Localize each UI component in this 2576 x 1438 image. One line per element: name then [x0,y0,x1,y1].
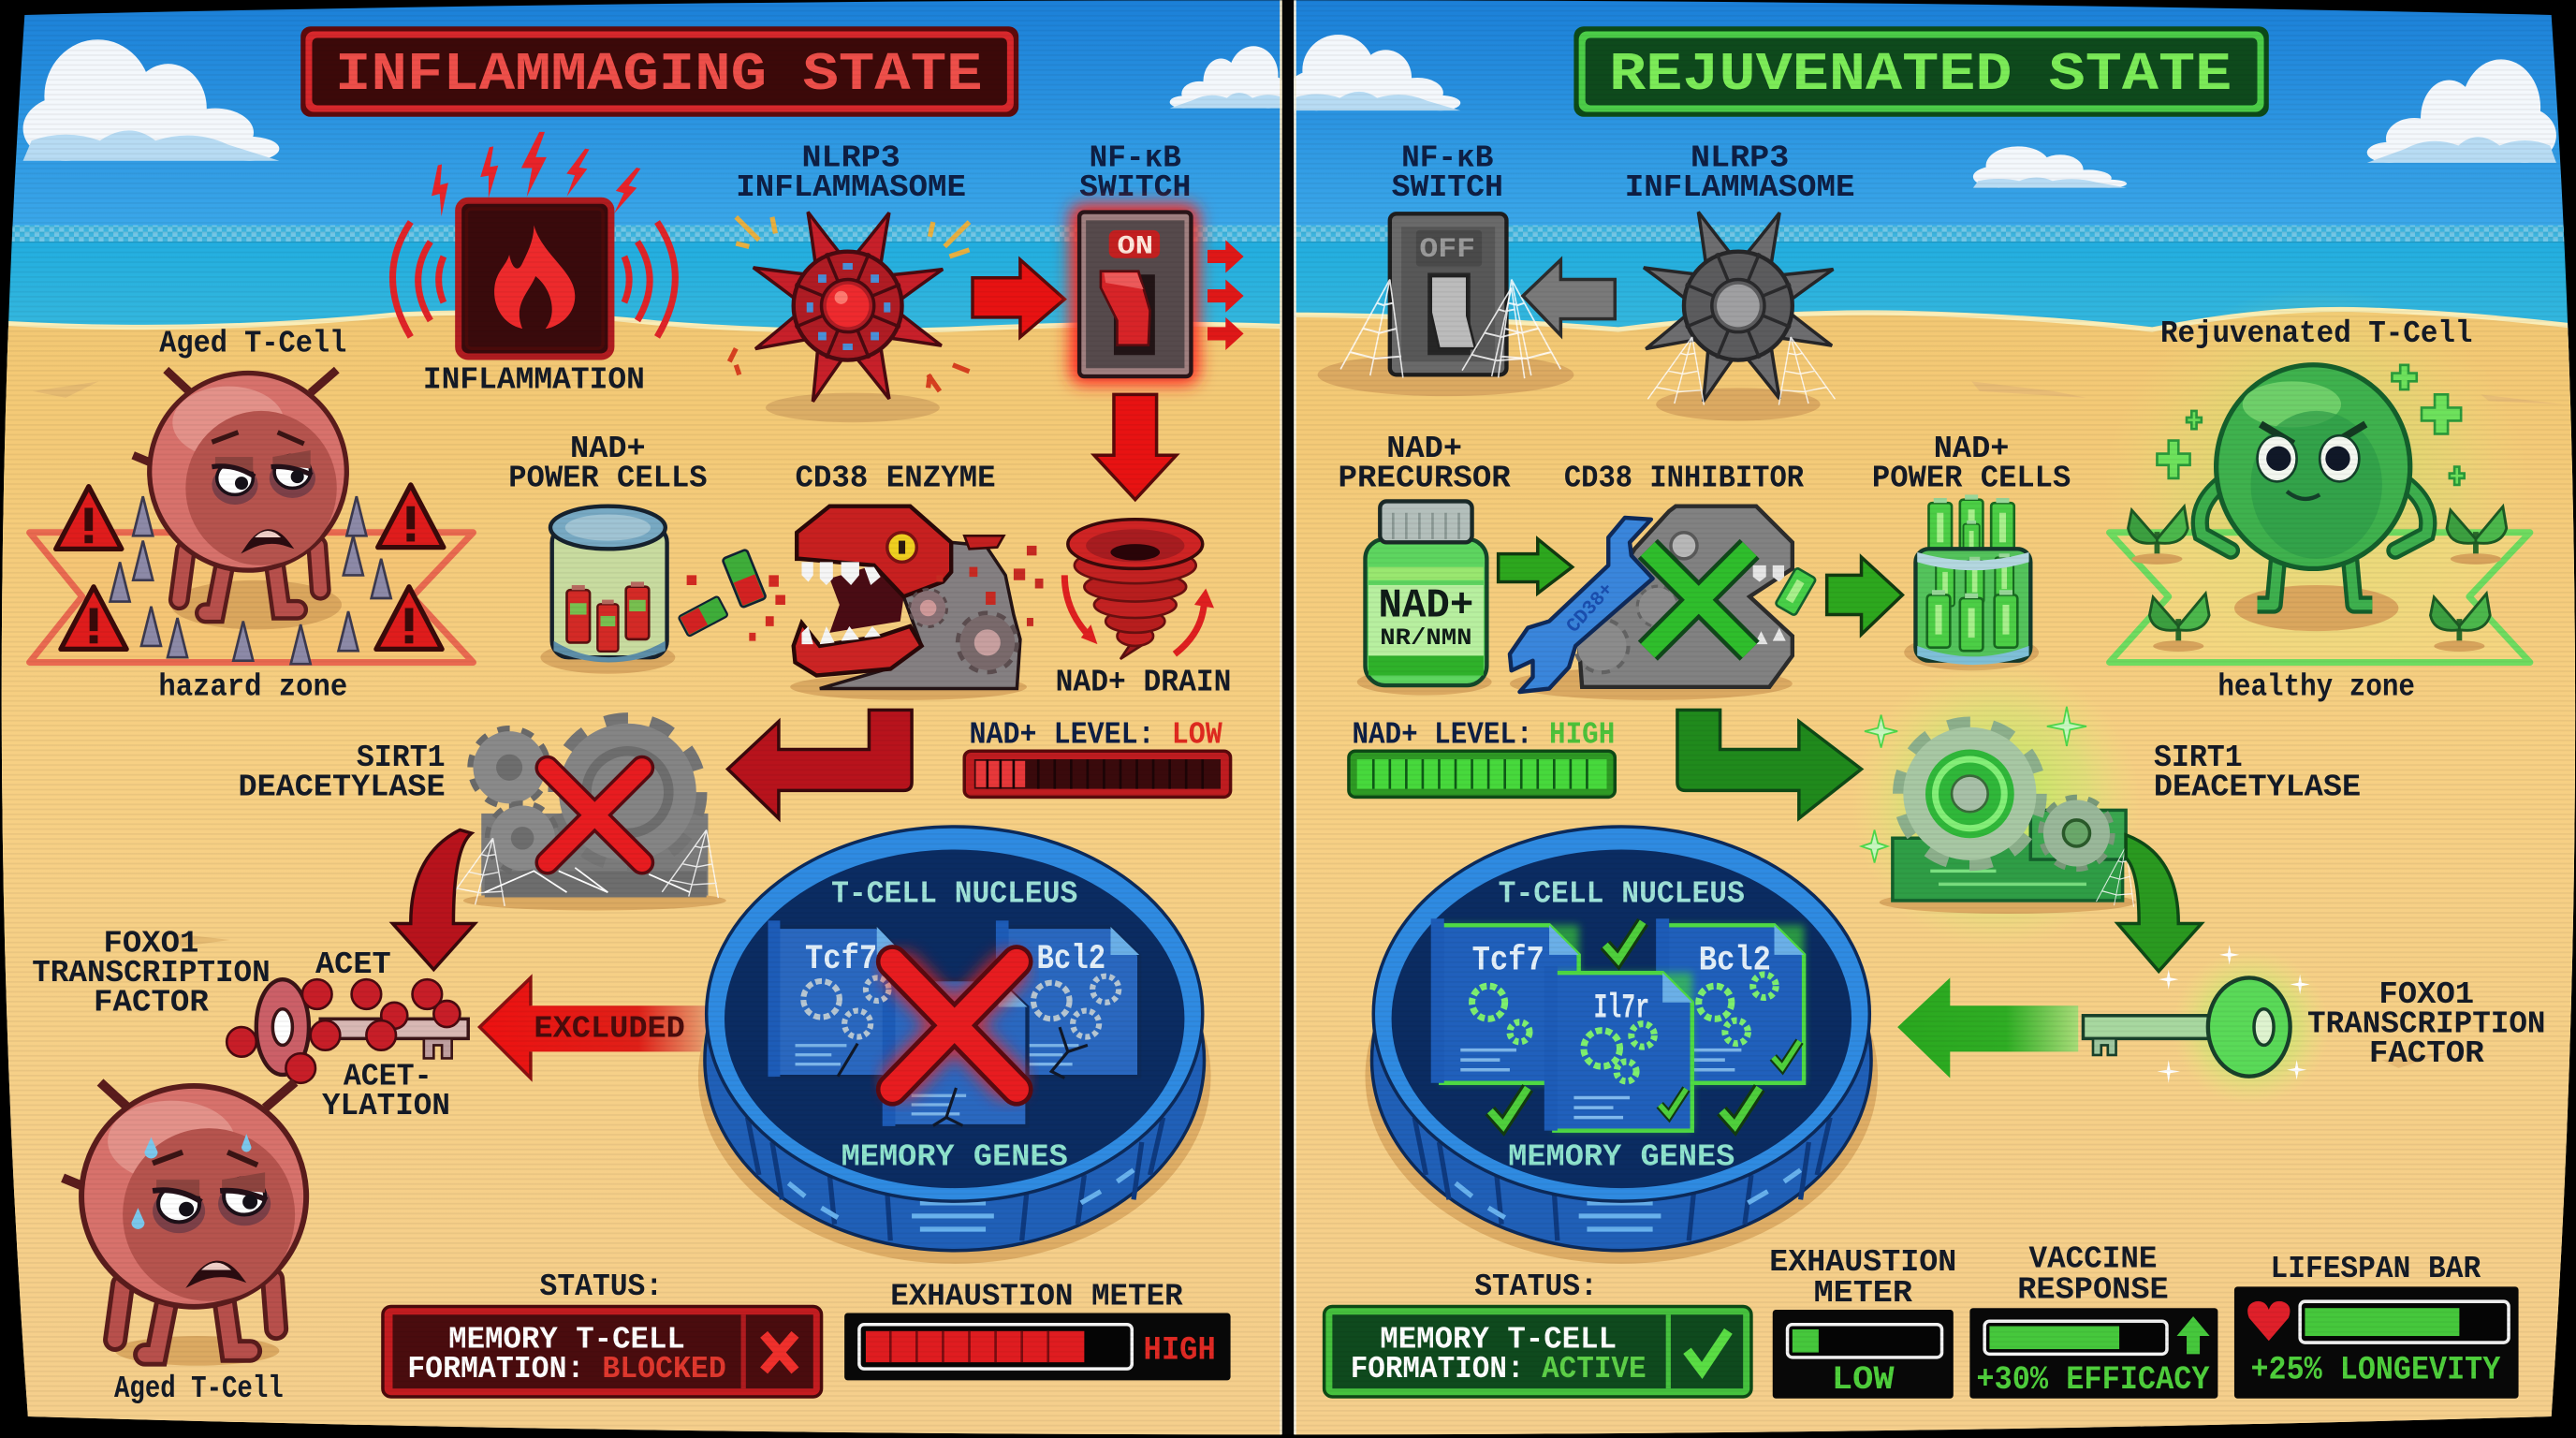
label: nf-kb switch: SWITCH [1079,170,1191,206]
icon: nlrp3 inflammasome red [729,206,970,422]
panel: t-cell nucleus active: Tcf7 [1472,942,1544,981]
panel: rejuvenated state [1288,0,2576,1438]
panel: t-cell nucleus active: MEMORY GENES [1508,1140,1734,1176]
icon: nad+ precursor bottle [1357,501,1492,696]
status box: active: FORMATION: ACTIVE [1351,1352,1647,1387]
label: nf-kb switch right: NF-κB [1401,140,1493,176]
label: sirt1 deacetylase right: SIRT1 [2154,741,2243,776]
arrow: inactive gray [1523,259,1615,335]
label: aged t-cell lower: Aged T-Cell [114,1372,284,1407]
arrow: nlrp3 to nf-kb [973,259,1064,337]
icons: sparkle plus [2157,365,2465,485]
panel: inflammaging state [0,0,1288,1438]
gauge: exhaustion low: LOW [1832,1361,1895,1399]
title banner: rejuvenated state: REJUVENATED STATE [1609,45,2232,106]
label: healthy zone: healthy zone [2217,670,2415,706]
label: nlrp3 inflammasome: INFLAMMASOME [736,170,966,206]
icon: nad+ drain tornado [1064,520,1214,659]
label: sirt1 deacetylase right: DEACETYLASE [2154,770,2361,806]
panel: t-cell nucleus blocked [698,827,1211,1264]
label: acet: ACET [315,947,391,983]
label: foxo1 transcription factor [32,926,271,1021]
panel: t-cell nucleus blocked: Bcl2 [1036,940,1105,979]
label: lifespan bar: LIFESPAN BAR [2271,1252,2481,1287]
icon: cd38 inhibitor: CD38+ [1562,579,1618,638]
arrows: switch output [1208,240,1244,350]
gauge: exhaustion low [1773,1310,1954,1399]
label: nad+ drain: NAD+ DRAIN [1056,665,1231,700]
character: aged t-cell on hazard zone [133,370,346,613]
icon: escaping batteries [679,550,785,641]
arrow: inhibitor to sirt1 [1677,710,1862,818]
label: exhaustion meter: EXHAUSTION METER [890,1280,1183,1315]
icon: cd38 inhibitor [1510,506,1816,700]
label: nad+ precursor [1339,432,1511,497]
panel: t-cell nucleus active: T-CELL NUCLEUS [1499,877,1745,913]
label: hazard zone: hazard zone [158,670,347,706]
arrow: foxo1 to nucleus [1897,977,2078,1078]
panel: t-cell nucleus active [1365,827,1878,1264]
arrow: excluded: EXCLUDED [534,1012,685,1048]
status box: blocked [383,1306,822,1397]
label: foxo1 transcription factor right: FACTOR [2369,1036,2484,1072]
label: foxo1 transcription factor right [2307,977,2546,1072]
arrow: switch to drain [1094,394,1177,500]
label: vaccine response [2017,1241,2169,1309]
icon: nf-kb switch off [1318,213,1573,396]
icon: nlrp3 inflammasome gray [1638,206,1838,420]
title banner: rejuvenated state [1573,26,2269,117]
label: nad+ precursor: PRECURSOR [1339,462,1511,497]
panel: healthy zone [2103,287,2530,698]
gauge: vaccine response: +30% EFFICACY [1976,1361,2210,1399]
label: nad+ power cells right: NAD+ [1934,432,2009,467]
label: nf-kb switch right: SWITCH [1392,170,1503,206]
icon: nf-kb switch off: OFF [1419,233,1475,265]
label: sirt1 deacetylase: SIRT1 [357,741,446,776]
panel: hazard zone [30,485,473,664]
label: status right: STATUS: [1474,1269,1598,1305]
label: sirt1 deacetylase: DEACETYLASE [238,770,446,806]
label: acetylation: YLATION [322,1089,450,1124]
label: inflammation: INFLAMMATION [423,362,645,398]
label: nad+ power cells: POWER CELLS [508,462,708,497]
label: nad+ power cells [508,432,708,497]
label: nad+ power cells right: POWER CELLS [1872,462,2071,497]
label: cd38 inhibitor: CD38 INHIBITOR [1564,462,1804,497]
label: acetylation [322,1060,450,1124]
label: acetylation: ACET- [344,1060,432,1095]
gauge: nad+ level low [964,751,1231,797]
panel: t-cell nucleus active: Bcl2 [1699,942,1771,981]
status box: active: MEMORY T-CELL [1380,1322,1617,1357]
label: sirt1 deacetylase [238,741,446,806]
label: foxo1 transcription factor: FOXO1 [104,926,198,961]
icon: nf-kb switch on: ON [1117,232,1153,261]
label: rejuvenated t-cell: Rejuvenated T-Cell [2160,316,2472,352]
icon: inflammation [392,132,675,357]
icon: nf-kb switch on [1070,204,1199,385]
label: vaccine response: RESPONSE [2017,1273,2169,1309]
arrow: sirt1 to foxo1 [392,829,475,970]
arrow: excluded [479,977,707,1078]
arrow: inhibitor to cells [1827,557,1902,635]
label: aged t-cell: Aged T-Cell [159,327,346,362]
label: nlrp3 inflammasome right: NLRP3 [1690,140,1789,176]
label: nad+ precursor: NAD+ [1386,432,1462,467]
label: foxo1 transcription factor right: TRANSCRIPTION [2307,1006,2546,1042]
label: vaccine response: VACCINE [2029,1241,2157,1277]
character: rejuvenated t-cell [2200,365,2428,605]
gauge: lifespan: +25% LONGEVITY [2250,1352,2500,1389]
gauge: lifespan [2234,1286,2519,1399]
label: cd38 enzyme: CD38 ENZYME [795,462,996,497]
arrow: cd38 to sirt1 [728,710,912,818]
icon: cd38 enzyme monster [790,506,1043,700]
status box: blocked: FORMATION: BLOCKED [407,1352,726,1387]
panel: t-cell nucleus active: Il7r [1593,990,1649,1029]
gauge: vaccine response [1969,1308,2217,1399]
label: exhaustion meter right: METER [1814,1276,1912,1312]
label: sirt1 deacetylase right [2154,741,2361,806]
panel: t-cell nucleus blocked: T-CELL NUCLEUS [831,877,1077,913]
icon: full jar [1904,494,2039,670]
label: nad+ level high: NAD+ LEVEL: HIGH [1352,717,1615,753]
arrow: sirt1 to foxo1 right [2117,835,2202,971]
label: foxo1 transcription factor: FACTOR [94,986,209,1021]
icon: acetylated foxo1 key [227,979,468,1083]
title banner: inflammaging state [300,26,1018,117]
label: foxo1 transcription factor: TRANSCRIPTION [32,956,271,991]
label: nf-kb switch right [1392,140,1503,206]
label: nlrp3 inflammasome: NLRP3 [801,140,900,176]
gauge: exhaustion high [844,1313,1231,1380]
label: foxo1 transcription factor right: FOXO1 [2378,977,2474,1013]
arrow: precursor to inhibitor [1499,539,1573,594]
panel: t-cell nucleus blocked: MEMORY GENES [842,1140,1068,1176]
label: status: STATUS: [540,1269,663,1305]
label: nad+ power cells: NAD+ [570,432,646,467]
label: exhaustion meter right: EXHAUSTION [1769,1245,1956,1281]
label: exhaustion meter right [1769,1245,1956,1312]
label: nlrp3 inflammasome right: INFLAMMASOME [1625,170,1855,206]
character: aged t-cell sweating [63,1082,306,1366]
gauge: exhaustion high: HIGH [1144,1332,1216,1370]
gauge: nad+ level high [1349,751,1615,797]
icon: active foxo1 key [2083,945,2330,1106]
status box: blocked: MEMORY T-CELL [448,1322,685,1357]
label: nf-kb switch [1080,146,1189,197]
icon: blocked sirt1 gears [448,724,726,910]
panel: t-cell nucleus blocked: Tcf7 [805,940,877,979]
icon: depleted jar [540,506,675,674]
label: nad+ level low: NAD+ LEVEL: LOW [970,717,1222,753]
label: nad+ power cells right [1872,432,2071,497]
label: nlrp3 inflammasome [738,145,965,197]
title banner: inflammaging state: INFLAMMAGING STATE [335,45,983,106]
icon: nad+ precursor bottle: NAD+ [1379,582,1473,629]
status box: active [1325,1306,1751,1397]
icon: nad+ precursor bottle: NR/NMN [1380,626,1472,652]
icon: active sirt1 gears [1852,661,2141,950]
label: nlrp3 inflammasome right [1625,140,1855,206]
label: nf-kb switch: NF-κB [1090,140,1181,176]
